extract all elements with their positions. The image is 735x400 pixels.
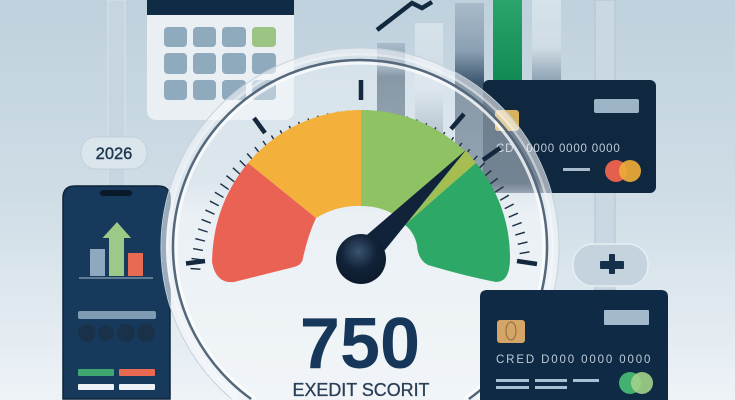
card signature strip [594,99,639,113]
rail: left vertical strip [108,0,125,186]
pill: plus button [573,244,648,286]
card logo [605,160,641,182]
card signature strip [604,310,649,325]
bar chart: rising bars [377,0,561,193]
card lines [496,379,599,389]
arrow: trend line [377,2,432,30]
calendar header [147,0,294,15]
phone bar chart with arrow [79,222,153,278]
gauge: olive strip [415,150,476,218]
score number: 750 [300,304,420,384]
card chip [497,320,525,343]
phone round buttons [78,324,155,342]
card lines [563,168,590,171]
gauge tick marks [186,80,537,270]
gauge dial glass [161,48,559,399]
pill: year 2026: 2026 [96,145,132,163]
score label: EXEDIT SCORIT [292,380,430,400]
calendar day cells [164,27,276,100]
card number: CD 0000 0000 0000 [496,143,621,155]
card number: CRED D000 0000 0000 [496,354,651,366]
phone white bars [78,384,155,390]
gauge: dark green segment [405,163,510,282]
panel: phone [63,186,170,399]
card logo [619,372,653,394]
rail: right vertical strip [595,0,615,290]
card chip [495,110,519,131]
panel: credit card bottom [480,290,668,400]
gauge: yellow segment [248,110,361,218]
gauge: red segment [212,163,316,282]
panel: credit card top [483,80,656,193]
gauge hub [336,234,386,284]
gauge: light green segment [361,110,476,228]
gauge needle [354,150,466,266]
phone green and red bars [78,369,155,376]
pill: year 2026 [81,137,147,169]
phone slider bar [78,311,156,319]
phone notch [100,190,132,196]
panel: calendar [147,0,294,120]
